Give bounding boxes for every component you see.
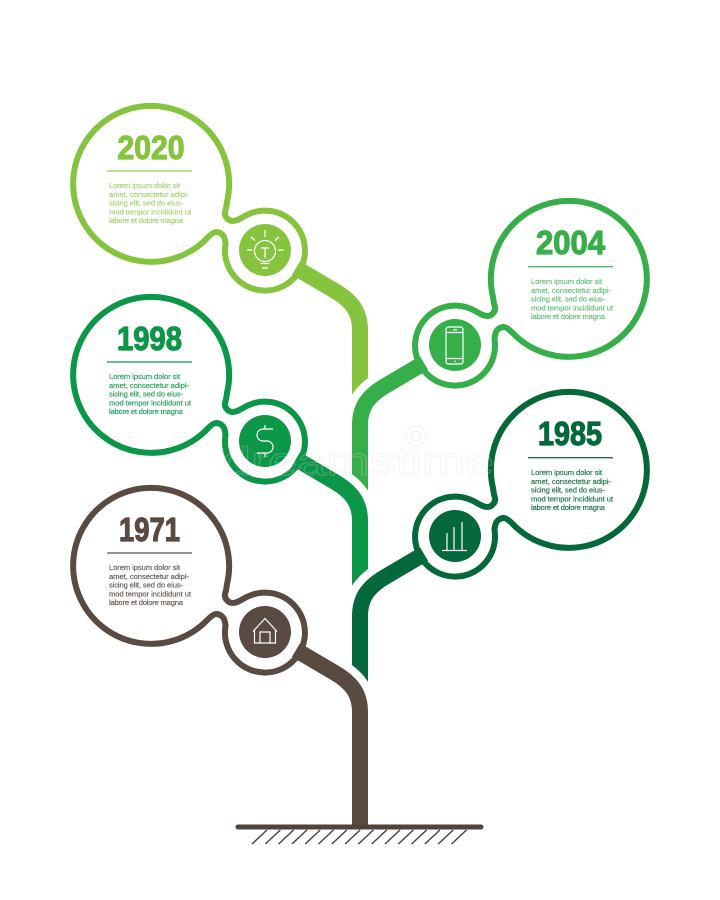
body text: 1985: Lorem ipsum dolor sit xyxy=(531,468,603,477)
node disc: 1985 xyxy=(429,510,481,562)
body text: 2004: Lorem ipsum dolor sit xyxy=(531,277,603,286)
body text: 1971: Lorem ipsum dolor sit xyxy=(109,563,181,572)
body text: 2004: labore et dolore magna xyxy=(531,312,606,321)
body text: 2004: mod tempor incididunt ut xyxy=(531,303,614,312)
node disc: 1971 xyxy=(239,606,291,658)
year: 2004: 2004 xyxy=(536,224,606,261)
body text: 1971: labore et dolore magna xyxy=(109,598,184,607)
body text: 1971: mod tempor incididunt ut xyxy=(109,589,192,598)
keyhole outline: 1998 xyxy=(73,297,305,482)
year: 1998: 1998 xyxy=(117,320,182,357)
body text: 2004: amet, consectetur adipi- xyxy=(531,286,611,295)
panel: 1971 xyxy=(73,488,305,673)
keyhole outline: 2020 xyxy=(73,106,305,291)
body text: 1998: labore et dolore magna xyxy=(109,407,184,416)
node disc: 2004 xyxy=(429,319,481,371)
tree trunk and branches xyxy=(296,268,424,827)
icon: house xyxy=(253,618,277,643)
divider: 1985 xyxy=(528,457,613,458)
icon: smartphone xyxy=(446,327,463,364)
body text: 2004: sicing elit, sed do eius- xyxy=(531,295,605,304)
body text: 2020: mod tempor incididunt ut xyxy=(109,207,192,216)
divider: 2020 xyxy=(107,170,192,172)
panel: 2020 xyxy=(73,106,305,291)
panel: 2004 xyxy=(415,201,647,386)
branch: 2004 xyxy=(360,363,424,500)
node disc: 2020 xyxy=(239,224,291,276)
divider: 2004 xyxy=(528,266,613,267)
body text: 1985: amet, consectetur adipi- xyxy=(531,477,611,486)
body text: 1985: sicing elit, sed do eius- xyxy=(531,486,605,495)
divider: 1971 xyxy=(107,552,192,554)
branch: 2020 xyxy=(296,268,360,400)
body text: 2020: Lorem ipsum dolor sit xyxy=(109,181,181,190)
watermark xyxy=(222,426,494,484)
icon: light bulb xyxy=(247,230,284,268)
body text: 1998: amet, consectetur adipi- xyxy=(109,381,189,390)
year: 1971: 1971 xyxy=(119,511,180,548)
body text: 1971: sicing elit, sed do eius- xyxy=(109,581,183,590)
icon: dollar sign xyxy=(257,425,273,457)
trunk: 1971 xyxy=(296,650,360,827)
body text: 2020: sicing elit, sed do eius- xyxy=(109,199,183,208)
year: 2020: 2020 xyxy=(118,129,184,166)
keyhole outline: 1971 xyxy=(73,488,305,673)
branch: 1985 xyxy=(360,554,424,690)
keyhole outline: 2004 xyxy=(415,201,647,386)
ground line with hatching xyxy=(238,827,481,844)
branch: 1998 xyxy=(296,459,360,600)
body text: 1998: sicing elit, sed do eius- xyxy=(109,390,183,399)
year: 1985: 1985 xyxy=(538,415,602,452)
body text: 1985: mod tempor incididunt ut xyxy=(531,494,614,503)
body text: 1985: labore et dolore magna xyxy=(531,503,606,512)
body text: 1998: Lorem ipsum dolor sit xyxy=(109,372,181,381)
panel: 1998 xyxy=(73,297,305,482)
node disc: 1998 xyxy=(239,415,291,467)
divider: 1998 xyxy=(107,361,192,363)
icon: bar chart xyxy=(442,522,467,550)
watermark: dreamstime xyxy=(222,440,494,484)
body text: 2020: labore et dolore magna xyxy=(109,216,184,225)
body text: 1998: mod tempor incididunt ut xyxy=(109,398,192,407)
body text: 2020: amet, consectetur adipi- xyxy=(109,190,189,199)
panel: 1985 xyxy=(415,392,647,577)
body text: 1971: amet, consectetur adipi- xyxy=(109,572,189,581)
keyhole outline: 1985 xyxy=(415,392,647,577)
